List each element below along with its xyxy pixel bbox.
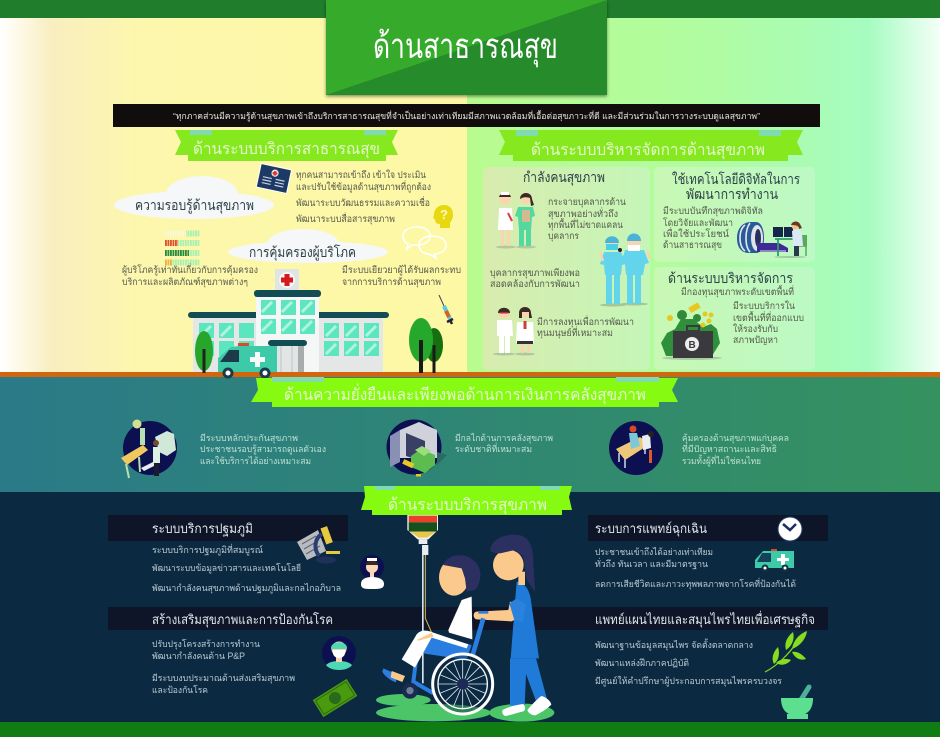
icon: surgery room circle	[121, 420, 177, 478]
text: digital records: เพื่อใช้ประโยชน์	[663, 227, 729, 240]
text: compensation: มีระบบเยียวยาผู้ได้รับผลกระทบ	[342, 264, 461, 276]
vision statement bar	[113, 104, 820, 127]
text: health security: มีระบบหลักประกันสุขภาพ	[200, 433, 298, 444]
illustration: ambulance	[218, 343, 277, 378]
text: area service system: เขตพื้นที่ที่ออกแบบ	[733, 311, 804, 324]
wheelchair frame	[402, 611, 488, 699]
icon: nurse avatar	[360, 555, 384, 589]
heading bar: health promotion and traditional medicine	[108, 607, 828, 630]
text: compensation	[342, 264, 461, 288]
text: national financing	[455, 433, 553, 454]
icon: herb leaves	[765, 631, 807, 672]
text: literacy bullets: ทุกคนสามารถเข้าถึง เข้าใจ ประเมิน	[296, 169, 426, 181]
icon: rating bars	[165, 234, 200, 262]
icon: health card	[256, 163, 292, 194]
heading: digital technology	[672, 171, 800, 202]
text: area service system: สภาพปัญหา	[733, 335, 778, 346]
heading: digital technology: ใช้เทคโนโลยีดิจิทัลในการ	[672, 171, 800, 187]
text: human capital investment	[537, 315, 634, 339]
heading bar: emergency medicine	[588, 515, 828, 541]
text: emergency list: ลดการเสียชีวิตและภาวะทุพพลภาพจากโรคที่ป้องกันได้	[595, 577, 796, 590]
text: distribution of staff	[548, 197, 626, 242]
panel: digital technology	[654, 167, 815, 262]
text: promotion list: และป้องกันโรค	[152, 685, 208, 695]
icon: small ambulance	[755, 549, 794, 572]
heading: health workforce: กำลังคนสุขภาพ	[523, 169, 605, 186]
icon: briefcase of money	[661, 302, 722, 360]
icon: vault circle	[386, 420, 447, 476]
icon: CT scanner and operator	[737, 221, 807, 258]
text: herbal list: พัฒนาแหล่งฝึกภาคปฏิบัติ	[595, 658, 689, 668]
icon: speech bubbles	[403, 227, 446, 258]
top green bar	[0, 0, 940, 18]
heading ribbon: health service system: ด้านระบบบริการสุขภาพ	[388, 496, 547, 515]
text: herbal list: มีศูนย์ให้คำปรึกษาผู้ประกอบการสมุนไพรครบวงจร	[595, 675, 782, 687]
text: health security	[200, 433, 326, 466]
heading bar: health promotion and traditional medicine: แพทย์แผนไทยและสมุนไพรไทยเพื่อเศรษฐกิจ	[595, 611, 815, 628]
text: health security: ประชาชนรอบรู้สามารถดูแลตัวเอง	[200, 444, 326, 455]
text: literacy bullets	[296, 169, 431, 225]
text: distribution of staff: สุขภาพอย่างทั่วถึง	[548, 207, 618, 220]
caregiver	[474, 535, 551, 716]
heading bar: emergency medicine: ระบบการแพทย์ฉุกเฉิน	[595, 521, 707, 537]
text: area health fund: มีกองทุนสุขภาพระดับเขตพื้นที่	[681, 285, 794, 298]
text: primary care list	[152, 543, 341, 594]
icon: patient bed circle	[609, 421, 663, 475]
illustration: left tree	[195, 331, 213, 373]
text: promotion list: มีระบบงบประมาณด้านส่งเสริมสุขภาพ	[152, 673, 295, 684]
panel: service section background	[0, 492, 940, 722]
text: herbal list: พัฒนาฐานข้อมูลสมุนไพร จัดตั้งตลาดกลาง	[595, 638, 753, 651]
heading ribbon: health management system	[499, 130, 803, 161]
panel: health workforce	[483, 167, 650, 370]
vision statement bar: “ทุกภาคส่วนมีความรู้ด้านสุขภาพเข้าถึงบริการสาธารณสุขที่จำเป็นอย่างเท่าเทียมมีสภาพแวดล้อมที่เอื้อต่อสุขภาวะที่ดี และมีส่วนร่วมในการวางระบบดูแลสุขภาพ”	[173, 110, 760, 122]
text: literacy bullets: พัฒนาระบบสื่อสารสุขภาพ	[296, 212, 395, 225]
heading ribbon: sustainable health financing	[251, 377, 678, 407]
IV stand and drip bag	[407, 515, 438, 683]
icon: head with question mark	[433, 205, 453, 228]
text: primary care list: พัฒนาระบบข้อมูลข่าวสารและเทคโนโลยี	[152, 563, 301, 574]
icon: syringe	[439, 295, 453, 324]
icon: briefcase of money: B	[688, 340, 696, 351]
text: sufficient staff: บุคลากรสุขภาพเพียงพอ	[490, 267, 580, 279]
patient	[382, 555, 480, 682]
icon: head with question mark: ?	[440, 207, 448, 222]
ground patches	[376, 694, 554, 722]
heading ribbon: health management system: ด้านระบบบริหารจัดการด้านสุขภาพ	[531, 141, 765, 160]
icon: microscope and x-ray	[297, 526, 340, 564]
title block: ด้านสาธารณสุข	[373, 27, 558, 67]
heading ribbon: public health service system	[175, 130, 398, 161]
illustration: right trees	[409, 318, 443, 373]
cloud: health literacy: ความรอบรู้ด้านสุขภาพ	[135, 197, 254, 214]
text: consumer awareness	[122, 263, 258, 288]
text: human capital investment: ทุนมนุษย์ที่เหมาะสม	[537, 326, 613, 339]
bottom green bar	[0, 722, 940, 737]
text: area service system: มีระบบบริการใน	[733, 300, 795, 312]
icon: mortar and pestle	[781, 687, 813, 719]
text: digital records: ด้านสาธารณสุข	[663, 240, 722, 251]
text: protecting vulnerable groups: ที่มีปัญหาสถานะและสิทธิ	[682, 442, 777, 454]
wheel	[433, 654, 493, 714]
text: national financing: มีกลไกด้านการคลังสุขภาพ	[455, 433, 553, 444]
icon: clock	[778, 517, 802, 541]
heading: digital technology: พัฒนาการทำงาน	[686, 186, 778, 202]
heading ribbon: public health service system: ด้านระบบบริการสาธารณสุข	[193, 140, 380, 159]
panel: financing section background	[0, 377, 940, 492]
text: primary care list: พัฒนากำลังคนสุขภาพด้านปฐมภูมิและกลไกอภิบาล	[152, 583, 341, 594]
text: area service system: ให้รองรับกับ	[733, 323, 778, 335]
text: health security: และใช้บริการได้อย่างเหมาะสม	[200, 456, 311, 466]
text: consumer awareness: บริการและผลิตภัณฑ์สุขภาพต่างๆ	[122, 276, 248, 288]
icon: surgeon avatar	[322, 636, 356, 670]
text: area service system	[733, 300, 804, 346]
background: upper right green	[467, 18, 940, 373]
text: national financing: ระดับชาติที่เหมาะสม	[455, 442, 532, 454]
text: digital records	[663, 205, 763, 251]
illustration: patient in wheelchair with caregiver	[376, 515, 554, 722]
text: promotion list: พัฒนากำลังคนด้าน P&P	[152, 651, 245, 661]
text: protecting vulnerable groups: รวมทั้งผู้ที่ไม่ใช่คนไทย	[682, 454, 761, 467]
cloud: consumer protection	[228, 229, 388, 263]
heading bar: primary care: ระบบบริการปฐมภูมิ	[152, 521, 253, 537]
text: sufficient staff	[490, 267, 580, 290]
text: consumer awareness: ผู้บริโภครู้เท่าทันเกี่ยวกับการคุ้มครอง	[122, 263, 258, 276]
illustration: hospital	[188, 269, 389, 372]
panel: management system	[654, 267, 815, 370]
text: protecting vulnerable groups: คุ้มครองด้านสุขภาพแก่บุคคล	[682, 433, 789, 444]
text: digital records: มีระบบบันทึกสุขภาพดิจิทัล	[663, 205, 763, 217]
heading ribbon: health service system	[361, 486, 572, 515]
text: literacy bullets: และปรับใช้ข้อมูลด้านสุขภาพที่ถูกต้อง	[296, 180, 431, 193]
text: promotion list	[152, 639, 295, 695]
background: upper left yellow	[0, 18, 467, 373]
title block	[326, 0, 607, 95]
heading: management system: ด้านระบบบริหารจัดการ	[668, 270, 793, 286]
icon: doctors	[493, 306, 535, 356]
text: compensation: จากการบริการด้านสุขภาพ	[342, 277, 441, 288]
text: emergency list: ประชาชนเข้าถึงได้อย่างเท่าเทียม	[595, 547, 713, 557]
cloud: health literacy	[114, 176, 274, 219]
cloud: consumer protection: การคุ้มครองผู้บริโภค	[249, 244, 356, 261]
icon: nurses	[496, 192, 536, 248]
text: herbal list	[595, 638, 782, 687]
text: distribution of staff: กระจายบุคลากรด้าน	[548, 197, 626, 208]
text: human capital investment: มีการลงทุนเพื่อการพัฒนา	[537, 315, 634, 328]
text: digital records: โดยวิจัยและพัฒนา	[663, 217, 733, 229]
text: distribution of staff: บุคลากร	[548, 231, 579, 242]
text: primary care list: ระบบบริการปฐมภูมิที่สมบูรณ์	[152, 543, 263, 556]
text: promotion list: ปรับปรุงโครงสร้างการทำงาน	[152, 639, 260, 650]
text: sufficient staff: สอดคล้องกับการพัฒนา	[490, 279, 580, 290]
heading bar: primary care	[108, 515, 348, 541]
heading ribbon: sustainable health financing: ด้านความยั่งยืนและเพียงพอด้านการเงินการคลังสุขภาพ	[284, 383, 646, 405]
text: literacy bullets: พัฒนาระบบวัฒนธรรมและความเชื่อ	[296, 196, 430, 209]
heading bar: health promotion and traditional medicine: สร้างเสริมสุขภาพและการป้องกันโรค	[152, 612, 333, 628]
icon: surgeons	[600, 234, 650, 306]
text: emergency list: ทั่วถึง ทันเวลา และมีมาตรฐาน	[595, 557, 708, 570]
orange divider	[0, 372, 940, 377]
icon: banknote	[313, 679, 357, 717]
text: protecting vulnerable groups	[682, 433, 789, 467]
text: distribution of staff: ทุกพื้นที่ไม่ขาดแคลน	[548, 218, 623, 231]
text: emergency list	[595, 547, 796, 590]
